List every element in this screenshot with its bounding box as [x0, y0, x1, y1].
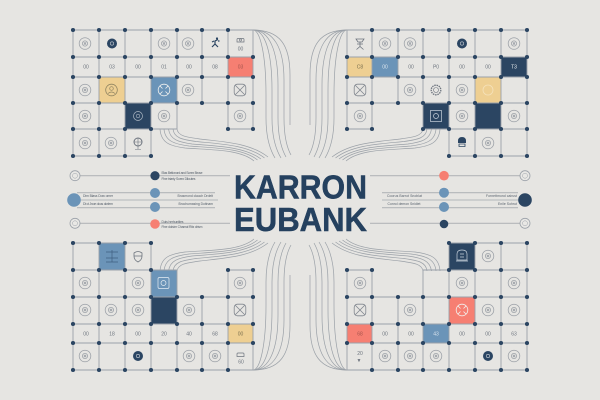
cell labels top-right: C8 — [357, 64, 363, 70]
legend row 2 left: Brochumasing Doitnam — [178, 202, 213, 206]
cell labels bottom-left: 00 — [238, 332, 243, 338]
cell labels bottom-left — [83, 332, 244, 366]
legend row 3 left: Duis herhunities — [162, 220, 184, 224]
cell labels top-right: 00 — [408, 64, 414, 70]
cell labels top-left: 03 — [238, 64, 243, 70]
cell labels bottom-right: 00 — [408, 332, 414, 338]
cell labels bottom-left: 20 — [161, 332, 167, 338]
title — [234, 168, 367, 238]
panel: right legend — [370, 171, 532, 228]
legend row 1 left: Fine triarty Sorex Diloutes — [162, 177, 196, 181]
legend row 2 left — [67, 188, 218, 212]
cell labels bottom-left: 40 — [186, 332, 192, 338]
panel: bottom-right grid — [309, 239, 527, 370]
curved connector lines bottom-right — [309, 239, 440, 370]
icons bottom-left — [79, 250, 246, 362]
title: KARRON — [234, 168, 367, 206]
cell labels bottom-right — [357, 332, 517, 364]
legend row 2 left: Brusmond clauch Drdelt — [178, 194, 213, 198]
legend row 3 right — [370, 218, 530, 228]
icons top-right — [354, 38, 520, 149]
cell labels bottom-right: 68 — [357, 332, 363, 338]
cell labels bottom-right: 00 — [459, 332, 465, 338]
legend row 2 right: Coorus Barrot Snoblat — [387, 194, 422, 198]
cell labels bottom-left: 18 — [109, 332, 115, 338]
coloured cells top-left — [99, 57, 253, 129]
panel: top-left grid — [73, 30, 291, 161]
cell labels bottom-right: 20 — [357, 351, 363, 357]
cell labels top-right: 00 — [382, 64, 388, 70]
cell labels top-left: 01 — [161, 64, 167, 70]
cell labels top-right: 00 — [485, 64, 491, 70]
cell labels top-right: T3 — [511, 64, 517, 70]
title: EUBANK — [234, 201, 367, 238]
cell labels top-right: 00 — [459, 64, 465, 70]
curved connector lines bottom-left — [160, 239, 291, 370]
cell labels bottom-right: 00 — [382, 332, 388, 338]
cell labels top-left — [83, 46, 243, 70]
panel: top-right grid — [309, 30, 527, 161]
legend row 2 right — [382, 188, 532, 212]
cell labels top-right: P0 — [433, 64, 439, 70]
cell labels top-left: 00 — [83, 64, 89, 70]
cell labels top-left: 08 — [212, 64, 218, 70]
cell labels bottom-right: 63 — [511, 332, 517, 338]
legend row 2 right: Conrol demon Snidiet — [388, 202, 421, 206]
legend row 3 left — [70, 218, 230, 229]
cell labels top-left: 03 — [109, 64, 115, 70]
cell labels bottom-left: 00 — [135, 332, 141, 338]
legend row 2 right: Fornettmond cairust — [486, 194, 517, 198]
legend row 1 left — [70, 171, 230, 181]
legend row 2 left: Dim Blass Dow omer — [83, 194, 114, 198]
panel: left legend — [67, 171, 230, 229]
curved connector lines top-left — [160, 30, 291, 161]
legend row 1 right — [370, 171, 530, 181]
icons bottom-right — [354, 250, 520, 362]
legend row 3 left: Fine dolsim Chamal Ritz drism — [162, 225, 203, 229]
cell labels bottom-left: 60 — [238, 360, 244, 366]
cell labels bottom-left: 00 — [83, 332, 89, 338]
cell labels bottom-right: 43 — [433, 332, 439, 338]
panel: bottom-left grid — [73, 239, 291, 370]
legend row 2 right: Enile Sohrut — [498, 202, 517, 206]
cell labels bottom-right: ▼ — [357, 358, 361, 364]
coloured cells top-right — [347, 57, 527, 129]
cell labels top-right — [357, 64, 517, 70]
cell labels top-left: 00 — [135, 64, 141, 70]
cell labels top-left: 00 — [186, 64, 192, 70]
legend row 1 left: Elas Bellonord and Sorex Brose — [162, 171, 203, 175]
curved connector lines top-right — [309, 30, 440, 161]
icons top-left — [79, 37, 246, 150]
coloured cells bottom-left — [99, 243, 253, 343]
legend row 2 left: Di ct Jnoe dcus dorlem — [83, 202, 113, 206]
cell labels bottom-right: 00 — [485, 332, 491, 338]
cell labels bottom-left: 68 — [212, 332, 218, 338]
cell labels top-left: 00 — [238, 46, 243, 52]
coloured cells bottom-right — [347, 243, 475, 343]
